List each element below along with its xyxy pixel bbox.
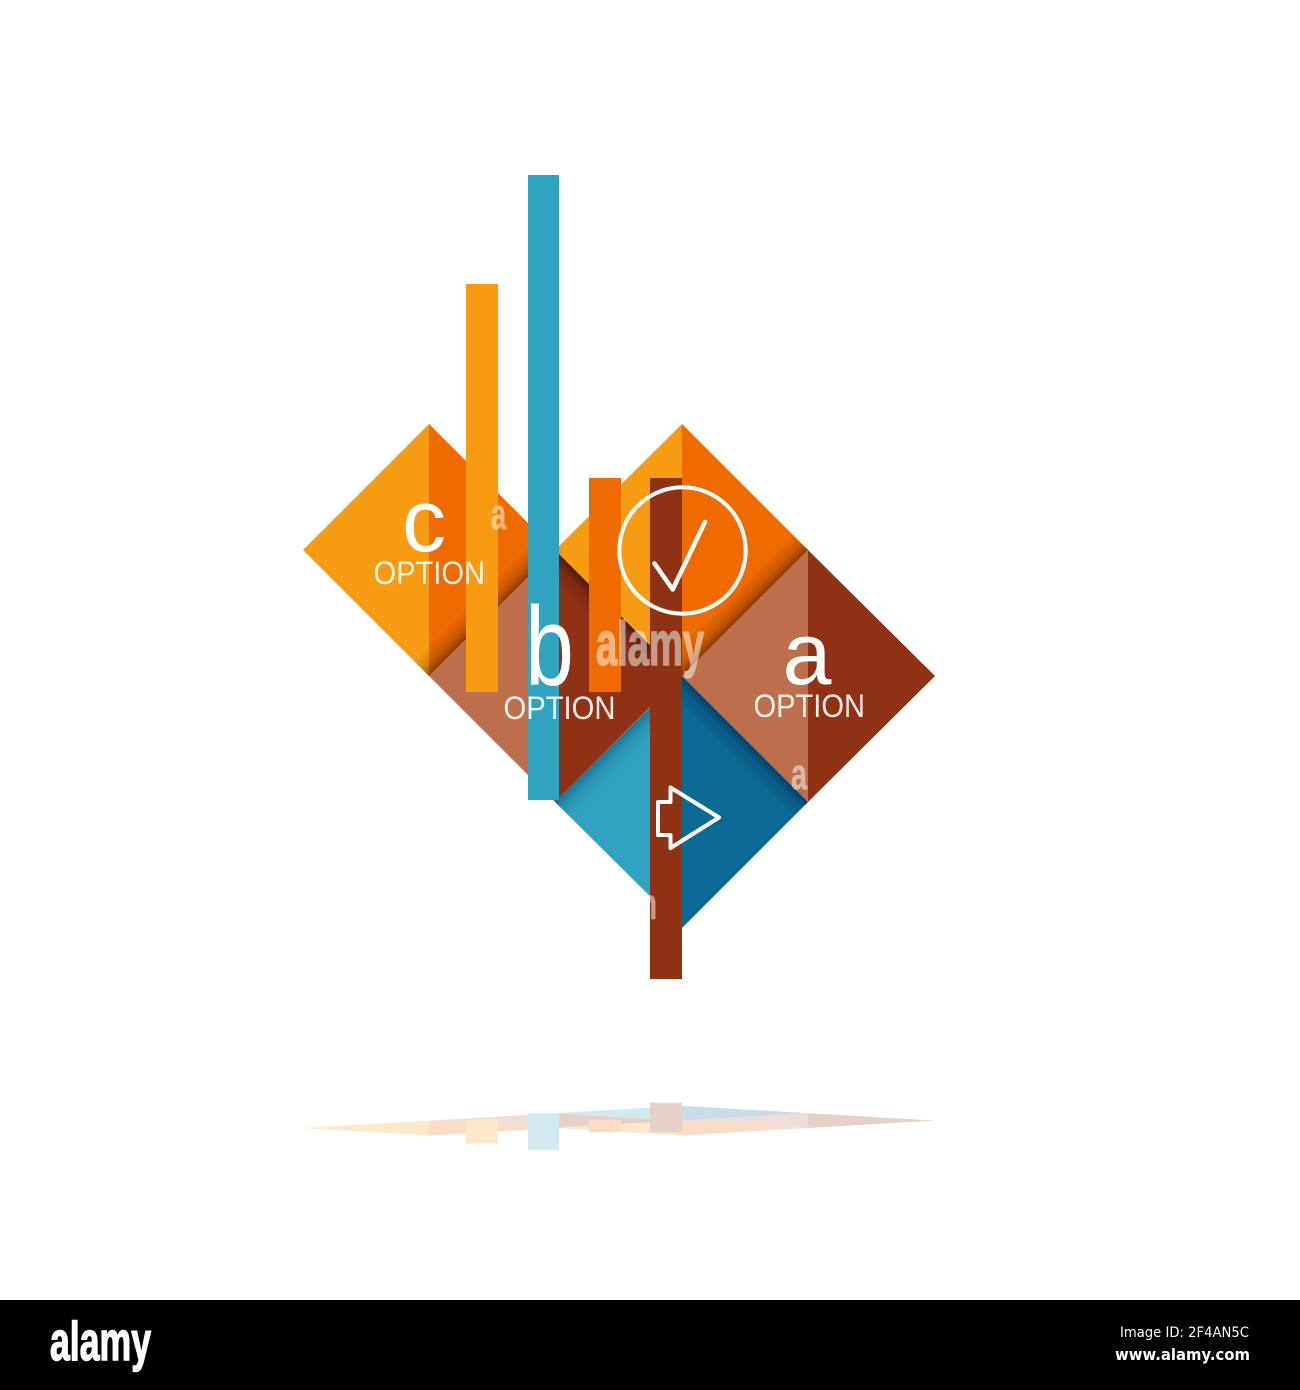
diamond: option c panel xyxy=(303,424,555,676)
label: option c: OPTION xyxy=(374,555,485,591)
diamond: check mark panel xyxy=(555,424,808,676)
label: option a xyxy=(754,604,865,724)
watermark logo: alamy xyxy=(596,610,704,679)
diamond: blue arrow panel xyxy=(555,676,808,928)
label: option a: a xyxy=(783,604,832,703)
label: option c: c xyxy=(402,471,446,570)
website: www.alamy.com xyxy=(1115,1345,1250,1364)
label: option c xyxy=(374,471,485,591)
bar: amber xyxy=(466,284,498,692)
label: option b: OPTION xyxy=(504,690,616,726)
footer band xyxy=(0,1300,1300,1390)
watermark letter: a xyxy=(491,490,506,539)
bar: orange xyxy=(589,478,621,692)
label: option b xyxy=(504,585,616,726)
bar: brown xyxy=(650,478,682,979)
label: option b: b xyxy=(525,585,574,710)
main diagram xyxy=(303,175,935,979)
diamond: option b panel xyxy=(429,550,681,802)
label: option a: OPTION xyxy=(754,688,865,724)
icon: outlined arrow xyxy=(658,788,719,848)
diamond: option a panel xyxy=(682,550,935,802)
watermark letter: a xyxy=(791,750,807,799)
footer logo: alamy xyxy=(50,1310,151,1372)
floor reflection xyxy=(303,1103,935,1150)
bar: blue xyxy=(528,175,559,800)
watermark text on diagram xyxy=(491,490,807,929)
watermark letter fragment: n xyxy=(640,880,657,929)
icon: check mark in circle xyxy=(619,487,746,614)
image id: Image ID: 2F4AN5C xyxy=(1120,1325,1249,1341)
